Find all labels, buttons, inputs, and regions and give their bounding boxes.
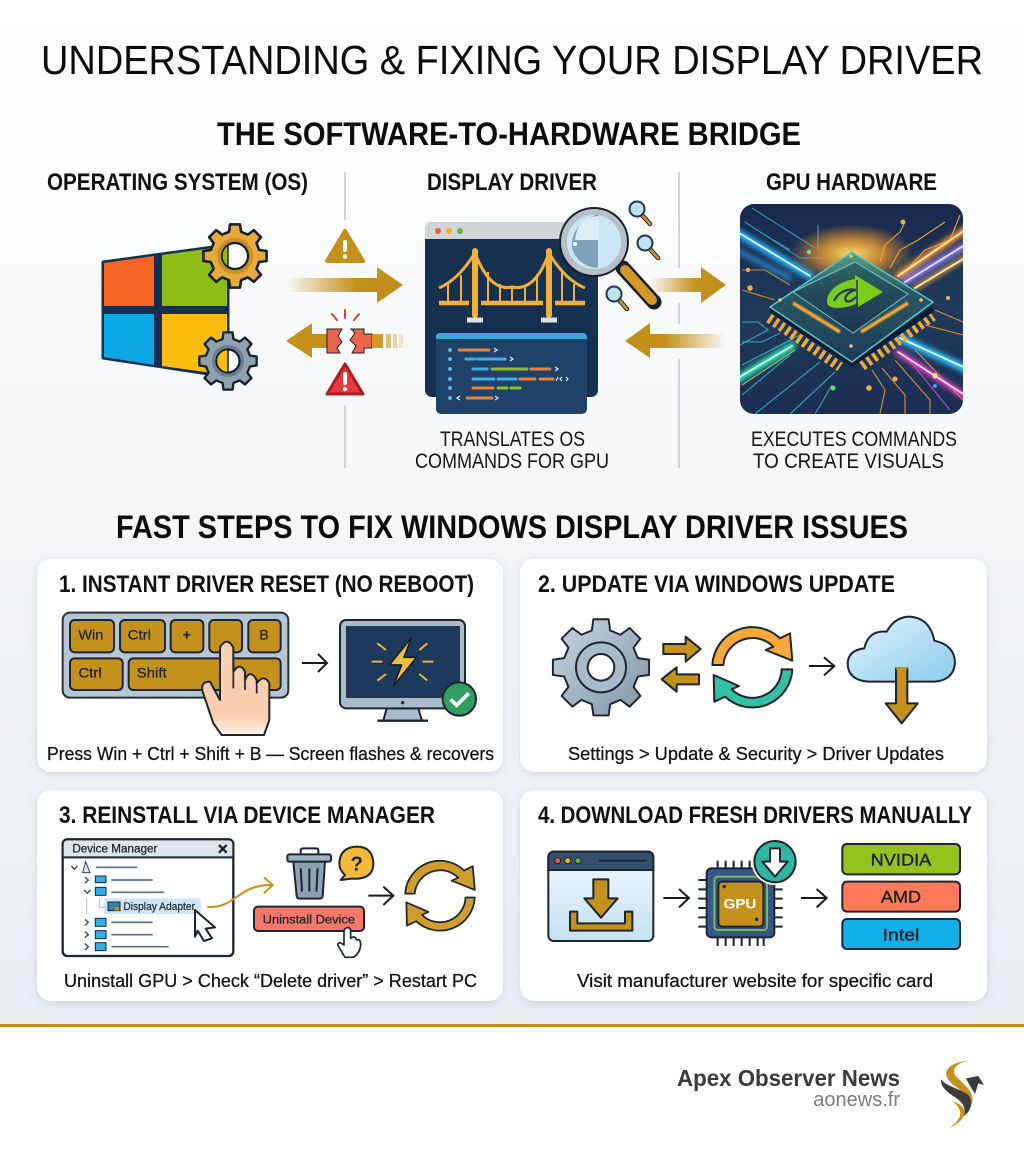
chip body	[770, 306, 933, 367]
icon: keyboard and hand: Shift	[137, 664, 167, 680]
vendor: Intel: Intel	[883, 925, 919, 944]
icon: keyboard and hand: +	[183, 626, 191, 642]
code panel	[436, 333, 587, 414]
arrow	[801, 889, 827, 907]
panel: step 2	[520, 559, 987, 772]
icon: grey gear	[199, 332, 257, 390]
icons: gear, sync, cloud	[553, 617, 955, 723]
footer brand name: Apex Observer News	[677, 1065, 900, 1091]
heading: fast steps: FAST STEPS TO FIX WINDOWS DISPLAY DRIVER ISSUES	[116, 509, 908, 545]
icon: device manager window: Device Manager	[72, 842, 157, 856]
icon: device manager window	[63, 839, 233, 956]
arrow: GPU to driver	[625, 323, 726, 358]
chip pins	[769, 318, 840, 367]
cursor	[195, 910, 215, 941]
icon: pointer hand	[338, 927, 361, 957]
circuit traces	[740, 208, 963, 414]
icon: sync arrows	[712, 627, 792, 708]
hand	[202, 642, 269, 735]
chip glow	[792, 225, 912, 276]
icon: question bubble	[339, 847, 373, 880]
step 2 caption: Settings > Update & Security > Driver Updates	[568, 744, 944, 764]
icon: question bubble: ?	[350, 853, 363, 876]
panel: step 3	[37, 790, 503, 1001]
icon: gold warning triangle	[327, 231, 363, 261]
button: uninstall device	[254, 907, 364, 931]
step 2 heading: 2. UPDATE VIA WINDOWS UPDATE	[538, 571, 895, 598]
step 3 caption: Uninstall GPU > Check “Delete driver” > Restart PC	[64, 971, 477, 991]
caption: driver role: TRANSLATES OS	[440, 428, 585, 451]
nvidia style logo	[827, 275, 883, 308]
caption: GPU role: TO CREATE VISUALS	[753, 450, 944, 473]
step 1 heading: 1. INSTANT DRIVER RESET (NO REBOOT)	[59, 571, 474, 598]
column heading: operating system: OPERATING SYSTEM (OS)	[47, 169, 308, 196]
panel: step 4	[520, 790, 987, 1001]
vendor: AMD: AMD	[881, 888, 921, 907]
arrow	[809, 657, 834, 675]
icon: download window	[548, 852, 653, 941]
caption: GPU role: EXECUTES COMMANDS	[751, 428, 957, 451]
icon: trash can	[287, 848, 331, 899]
step 4 caption: Visit manufacturer website for specific card	[577, 971, 933, 991]
arrow: curved gold	[207, 877, 273, 907]
arrow: broken return path	[286, 310, 403, 358]
step 1 caption: Press Win + Ctrl + Shift + B — Screen flashes & recovers	[47, 744, 494, 764]
footer band	[0, 1024, 1024, 1154]
icon: keyboard and hand: Win	[78, 626, 103, 642]
icons: small magnifiers	[606, 202, 658, 309]
column heading: display driver: DISPLAY DRIVER	[427, 169, 597, 196]
caption: driver role	[415, 428, 609, 473]
logo: eagle S	[941, 1061, 984, 1128]
icon: windows logo with gears	[103, 224, 267, 390]
image: GPU chip illustration	[736, 204, 968, 414]
chip top face	[793, 262, 908, 333]
display adapter row	[104, 898, 201, 914]
caption: GPU role	[751, 428, 957, 473]
arrow: driver to GPU	[650, 267, 726, 303]
arrows: two way exchange	[663, 637, 701, 662]
icon: GPU chip with download badge	[698, 838, 798, 946]
caption: driver role: COMMANDS FOR GPU	[415, 450, 609, 473]
display adapter row: Display Adapter	[123, 901, 195, 913]
icon: display driver window	[425, 222, 598, 414]
icon: keyboard and hand: Ctrl	[78, 664, 102, 680]
icon: keyboard and hand: B	[259, 626, 269, 642]
column heading: GPU hardware: GPU HARDWARE	[766, 169, 937, 196]
arrow	[368, 887, 393, 905]
icon: gold gear	[203, 224, 267, 288]
arrow: OS to driver	[286, 267, 403, 303]
arrow	[663, 889, 689, 907]
glowing light streaks	[736, 228, 968, 398]
icon: keyboard and hand: Ctrl	[128, 626, 151, 642]
vendor: NVIDIA: NVIDIA	[871, 851, 932, 870]
panel: step 1	[37, 559, 503, 772]
icon: bridge	[439, 251, 585, 320]
vendor: Intel	[842, 919, 960, 949]
icon: cloud download	[848, 617, 955, 723]
button: uninstall device: Uninstall Device	[263, 912, 355, 926]
vendor: NVIDIA	[842, 844, 960, 874]
vendor: AMD	[842, 882, 960, 912]
step 3 heading: 3. REINSTALL VIA DEVICE MANAGER	[59, 802, 435, 829]
arrow	[302, 654, 327, 672]
icon: GPU chip with download badge: GPU	[724, 895, 756, 911]
icon: keyboard and hand	[63, 613, 288, 735]
heading: software to hardware bridge: THE SOFTWARE-TO-HARDWARE BRIDGE	[217, 116, 801, 152]
icon: restart arrows	[405, 861, 475, 931]
footer site url: aonews.fr	[813, 1089, 900, 1111]
icon: settings gear	[553, 619, 649, 715]
icon: magnifying glass	[559, 207, 654, 302]
icon: red warning triangle	[327, 364, 363, 394]
icon: monitor with flash and check	[340, 620, 476, 721]
